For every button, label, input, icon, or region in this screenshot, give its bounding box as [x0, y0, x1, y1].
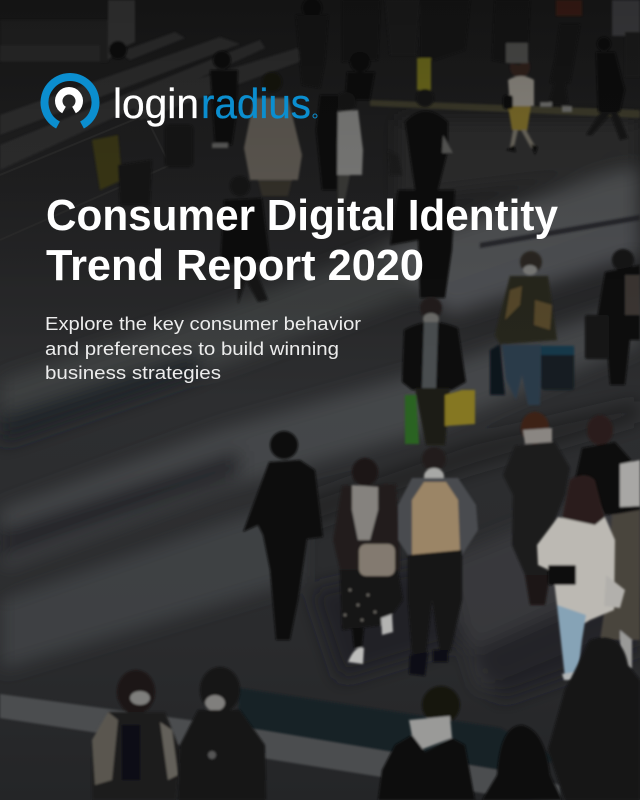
- person: foreground, centre left: [178, 667, 266, 800]
- subtitle: business strategies: [45, 362, 221, 383]
- crowd in the background (top): [92, 0, 640, 304]
- person: man in black: [243, 431, 323, 640]
- title: Trend Report 2020: [46, 241, 424, 290]
- person: yellow jacket far left: [92, 135, 122, 190]
- person: white coat: [336, 92, 356, 112]
- person: woman in black at right: [575, 415, 640, 670]
- person: black tall: [316, 95, 338, 190]
- person: top centre: [302, 0, 322, 18]
- logo: LoginRadius: radius: [201, 80, 311, 127]
- person: right edge walker with suitcase: [585, 249, 640, 385]
- crosswalk stripes top left: [0, 32, 310, 170]
- logo icon: [44, 77, 96, 125]
- person: foreground, large right: [548, 638, 640, 800]
- curb band: [0, 694, 560, 800]
- person: beige coat left: [262, 72, 282, 92]
- person: man with shopping bags: [402, 297, 475, 445]
- title: [46, 191, 558, 290]
- person: woman in dark coat: [503, 412, 570, 605]
- wet strip: [238, 688, 560, 770]
- person: foreground, left with mask: [92, 670, 180, 800]
- logo: LoginRadius: [44, 77, 317, 127]
- person: camo jacket with suitcase: [490, 251, 574, 405]
- person: woman in white sweater: [537, 475, 625, 680]
- person: foreground, dark hair: [482, 725, 562, 800]
- subtitle: Explore the key consumer behavior: [45, 313, 361, 334]
- dark overlay at top: [0, 0, 640, 360]
- subtitle: [45, 313, 361, 383]
- truck: [0, 0, 135, 62]
- person: black left: [213, 51, 231, 69]
- person: foreground, grey hood: [378, 686, 475, 800]
- person: dark walker right: [597, 37, 611, 51]
- title: Consumer Digital Identity: [46, 191, 558, 240]
- person: yellow skirt: [503, 56, 538, 155]
- logo wordmark: login: [113, 80, 199, 127]
- person: woman with scarf and bag: [333, 458, 403, 664]
- person: man in tan vest: [398, 447, 478, 676]
- person: dark walker top: [550, 24, 580, 83]
- subtitle: and preferences to build winning: [45, 338, 339, 359]
- person: dark centre behind title: [230, 176, 250, 196]
- people top cluster: [342, 0, 380, 62]
